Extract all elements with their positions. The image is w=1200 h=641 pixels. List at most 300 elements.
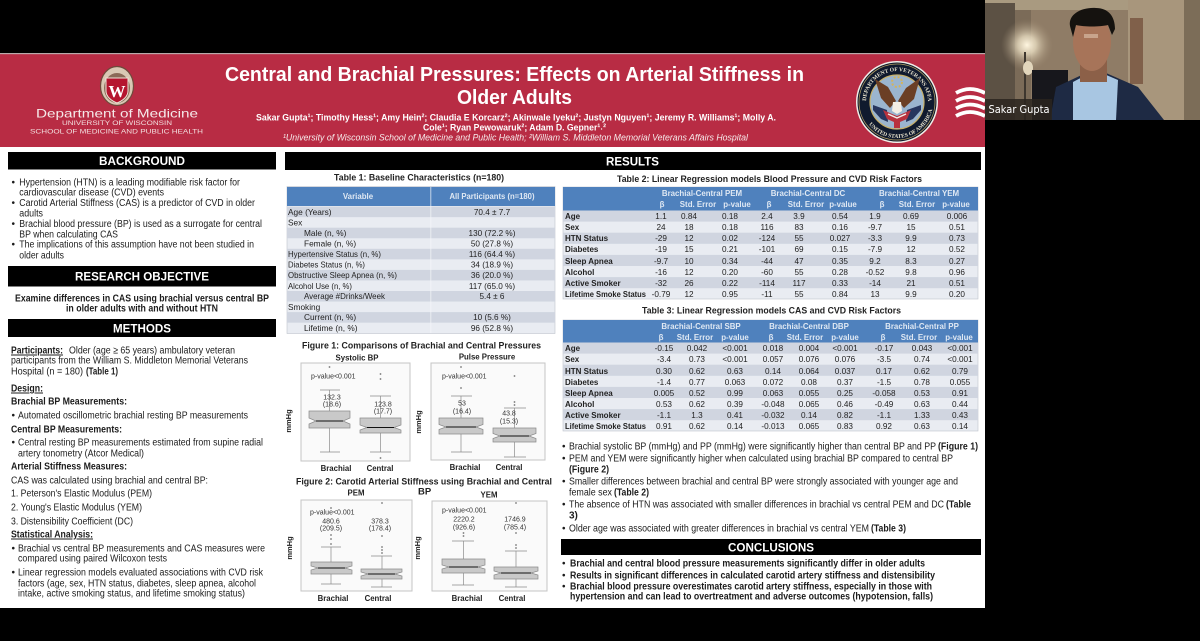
table 3: regression CAS and CVD risk factors: 0.005	[654, 389, 675, 398]
table 2: regression blood pressure and CVD risk factors: 13	[870, 290, 880, 299]
table 3: regression CAS and CVD risk factors: 0.52	[689, 389, 705, 398]
table 3: regression CAS and CVD risk factors: 0.072	[763, 378, 784, 387]
text: arterial stiffness measures: 2. Young's Elastic Modulus (YEM)	[11, 502, 142, 514]
heading: methods: METHODS	[113, 322, 171, 336]
chart: PEM box plot: Central	[365, 594, 391, 603]
table 2: regression blood pressure and CVD risk factors: 15	[684, 245, 694, 254]
objective statement	[15, 294, 269, 314]
bullet list: results findings: (Table	[946, 500, 971, 510]
table 2: regression blood pressure and CVD risk factors: 0.22	[722, 279, 738, 288]
table 3: regression CAS and CVD risk factors: 0.91	[656, 422, 672, 431]
table 3: regression CAS and CVD risk factors: β	[881, 333, 886, 342]
table 2: regression blood pressure and CVD risk factors: 9.8	[905, 268, 917, 277]
table 2: regression blood pressure and CVD risk factors: 0.34	[722, 257, 738, 266]
table 1: baseline characteristics: Hypertensive Status (n, %)	[288, 249, 381, 259]
authors and affiliations	[256, 112, 776, 144]
table 1: baseline characteristics: Current (n, %)	[304, 312, 356, 322]
text: design	[11, 384, 263, 460]
bullet list: results findings: female sex	[569, 488, 612, 498]
table 2: regression blood pressure and CVD risk factors: 0.006	[947, 212, 968, 221]
panel: research objective	[8, 266, 276, 314]
table 3: regression CAS and CVD risk factors: 0.17	[876, 367, 892, 376]
table 2: regression blood pressure and CVD risk factors: p-value	[942, 200, 970, 209]
heading: methods	[8, 319, 276, 337]
title	[225, 64, 804, 109]
bullet list: conclusions	[562, 558, 935, 602]
table 3: regression CAS and CVD risk factors: -0.49	[875, 400, 894, 409]
figure 2: carotid arterial stiffness: BP	[418, 486, 432, 498]
chart: PEM box plot: (209.5)	[320, 526, 342, 532]
table 2: regression blood pressure and CVD risk factors: 0.21	[722, 245, 738, 254]
table 2: regression blood pressure and CVD risk factors: 0.54	[832, 212, 848, 221]
bullet list: results findings: (Table 3)	[871, 524, 906, 534]
table 3: regression CAS and CVD risk factors: <0.001	[832, 344, 858, 353]
bullet list: results findings: •	[562, 500, 566, 510]
table 1: baseline characteristics: Smoking	[288, 302, 321, 312]
bullet list: background: •	[12, 198, 16, 209]
table 1: baseline characteristics: Average #Drinks/Week	[304, 291, 386, 301]
table 3: regression CAS and CVD risk factors: 0.30	[656, 367, 672, 376]
table 2: regression blood pressure and CVD risk factors: 1.1	[655, 212, 667, 221]
table 2: regression blood pressure and CVD risk factors: 12	[906, 245, 916, 254]
table 2: regression blood pressure and CVD risk factors: Lifetime Smoke Status	[565, 290, 647, 299]
table 1: baseline characteristics: 130 (72.2 %)	[469, 229, 516, 238]
table 2: regression blood pressure and CVD risk factors: -114	[759, 279, 775, 288]
table 3: regression CAS and CVD risk factors: -1.4	[657, 378, 672, 387]
table 2: regression blood pressure and CVD risk factors: Diabetes	[565, 245, 599, 254]
chart: YEM box plot: (785.4)	[504, 524, 526, 532]
bullet list: background: •	[12, 219, 16, 230]
authors and affiliations: Sakar Gupta¹; Timothy Hess¹; Amy Hein²; Claudia E Korcarz²; Akinwale Iyeku²; Justyn Nguyen¹; Jeremy R. Williams¹; Molly A.	[256, 112, 776, 124]
table 1: baseline characteristics: All Participants (n=180)	[450, 192, 535, 201]
table 3: regression CAS and CVD risk factors: <0.001	[947, 344, 973, 353]
table 2: regression blood pressure and CVD risk factors: 0.96	[949, 268, 965, 277]
text: arterial stiffness measures: 3. Distensibility Coefficient (DC)	[11, 516, 133, 528]
text: statistical analysis: Linear regression models evaluated associations with CVD risk	[18, 568, 264, 578]
table 3: regression CAS and CVD risk factors: 0.37	[837, 378, 853, 387]
table 3: regression CAS and CVD risk factors: 0.25	[837, 389, 853, 398]
table 2: regression blood pressure and CVD risk factors: 83	[794, 223, 804, 232]
table 3: regression CAS and CVD risk factors: 0.63	[914, 400, 930, 409]
table 2: regression blood pressure and CVD risk factors: 0.20	[722, 268, 738, 277]
table 2: regression blood pressure and CVD risk factors: 0.95	[722, 290, 738, 299]
header banner	[0, 53, 985, 147]
table 2: regression blood pressure and CVD risk factors: -7.9	[868, 245, 883, 254]
table 3: regression CAS and CVD risk factors: 0.39	[727, 400, 743, 409]
table 3: regression CAS and CVD risk factors: -0.17	[875, 344, 894, 353]
table 2: regression blood pressure and CVD risk factors: 0.18	[722, 223, 738, 232]
table 3: regression CAS and CVD risk factors: -0.032	[761, 411, 785, 420]
name tag	[985, 99, 1052, 120]
text: design: Automated oscillometric brachial resting BP measurements	[18, 410, 248, 422]
chart: PEM box plot: p-value<0.001	[310, 510, 355, 516]
table 3: regression CAS and CVD risk factors: 0.063	[725, 378, 746, 387]
panel: methods	[8, 319, 276, 600]
table 3: regression CAS and CVD risk factors: -3.4	[657, 355, 672, 364]
table 2: regression blood pressure and CVD risk factors: 117	[792, 279, 806, 288]
table 3: regression CAS and CVD risk factors: Sleep Apnea	[565, 389, 613, 398]
table 3: regression CAS and CVD risk factors: 0.74	[914, 355, 930, 364]
text: arterial stiffness measures	[11, 462, 208, 528]
table 3: regression CAS and CVD risk factors: -1.1	[657, 411, 672, 420]
poster background	[0, 146, 985, 608]
icon: UW crest: W	[108, 82, 126, 101]
table 3: regression CAS and CVD risk factors: 0.063	[763, 389, 784, 398]
table 2: regression blood pressure and CVD risk factors: 12	[684, 268, 694, 277]
table 2: regression blood pressure and CVD risk factors: Std. Error	[899, 200, 935, 209]
text: statistical analysis: compared using paired Wilcoxon tests	[18, 554, 167, 564]
table 3: regression CAS and CVD risk factors: 0.53	[914, 389, 930, 398]
table 2: regression blood pressure and CVD risk factors: 15	[906, 223, 916, 232]
table 1: baseline characteristics: Table 1: Baseline Characteristics (n=180)	[334, 172, 504, 184]
table 2: regression blood pressure and CVD risk factors: 0.027	[830, 234, 851, 243]
webcam video: presenter	[985, 0, 1200, 120]
table 3: regression CAS and CVD risk factors: 0.057	[763, 355, 784, 364]
text: participants: Older (age ≥ 65 years) ambulatory veteran	[69, 346, 235, 356]
table 3: regression CAS and CVD risk factors: 0.77	[689, 378, 705, 387]
table 3: regression CAS and CVD risk factors: 0.14	[727, 422, 743, 431]
table 3: regression CAS and CVD risk factors: 0.064	[799, 367, 820, 376]
table 3: regression CAS and CVD risk factors: <0.001	[722, 344, 748, 353]
bullet list: results findings: (Figure 2)	[569, 464, 609, 476]
authors and affiliations: ¹University of Wisconsin School of Medicine and Public Health; ²William S. Middleton Memorial Veterans Affairs Hospital	[283, 132, 749, 144]
table 2: regression blood pressure and CVD risk factors: 0.84	[832, 290, 848, 299]
table 3: regression CAS and CVD risk factors: Brachial-Central DBP	[769, 322, 849, 331]
table 2: regression blood pressure and CVD risk factors: 9.9	[905, 290, 917, 299]
table 3: regression CAS and CVD risk factors: 0.065	[799, 422, 820, 431]
table 1: baseline characteristics: 36 (20.0 %)	[471, 271, 513, 280]
logo: UW Department of Medicine: Department of Medicine	[36, 106, 198, 120]
table 3: regression CAS and CVD risk factors: -1.5	[877, 378, 892, 387]
table 3: regression CAS and CVD risk factors: -0.15	[655, 344, 674, 353]
chart: YEM box plot: Central	[499, 594, 525, 603]
table 2: regression blood pressure and CVD risk factors: 0.52	[949, 245, 965, 254]
table 3: regression CAS and CVD risk factors: 0.79	[952, 367, 968, 376]
icon: presenter figure	[1050, 8, 1164, 120]
bullet list: results findings: Brachial systolic BP (mmHg) and PP (mmHg) were significantly higher than central BP and PP	[569, 442, 936, 452]
chart: pulse pressure box plot: (16.4)	[453, 408, 471, 416]
table 3: regression CAS and CVD risk factors: 1.3	[691, 411, 703, 420]
bullet list: background: Brachial blood pressure (BP) is used as a surrogate for central	[19, 219, 262, 230]
chart: systolic BP box plot: Central	[367, 464, 393, 473]
bullet list: conclusions: hypertension and can lead to overtreatment and adverse outcomes (hypotension, falls)	[570, 592, 933, 602]
text: participants: Participants:	[11, 346, 63, 356]
table 3: regression CAS and CVD risk factors: <0.001	[722, 355, 748, 364]
chart: YEM box plot: YEM	[481, 490, 497, 500]
figure 1: comparisons of brachial and central pressures: Figure 1: Comparisons of Brachial and Central Pressures	[302, 340, 541, 352]
table 2: regression blood pressure and CVD risk factors: 55	[794, 268, 804, 277]
table 3: regression CAS and CVD risk factors: 0.44	[952, 400, 968, 409]
text: arterial stiffness measures: CAS was calculated using brachial and central BP:	[11, 476, 208, 486]
table 2: regression blood pressure and CVD risk factors: 10	[684, 257, 694, 266]
table 2: regression blood pressure and CVD risk factors: 9.9	[905, 234, 917, 243]
table 2: regression blood pressure and CVD risk factors: Brachial-Central DC	[771, 189, 846, 198]
chart: systolic BP box plot: 132.3	[323, 394, 341, 402]
table 2: regression blood pressure and CVD risk factors: 0.69	[903, 212, 919, 221]
text: participants	[11, 346, 248, 378]
chart: pulse pressure box plot: (15.3)	[500, 418, 518, 426]
table 2: regression blood pressure and CVD risk factors: 0.18	[722, 212, 738, 221]
table 3: regression CAS and CVD risk factors: 0.73	[689, 355, 705, 364]
table 3: regression CAS and CVD risk factors: 0.065	[799, 400, 820, 409]
heading: conclusions	[561, 539, 981, 555]
bullet list: background: BP when calculating CAS	[19, 230, 118, 240]
table 1: baseline characteristics: Obstructive Sleep Apnea (n, %)	[288, 270, 397, 280]
bullet list: background: cardiovascular disease (CVD) events	[19, 188, 164, 198]
chart: systolic BP box plot: (18.6)	[323, 402, 341, 408]
text: statistical analysis: Statistical Analysis:	[11, 530, 93, 540]
table 1: baseline characteristics: Diabetes Status (n, %)	[288, 260, 365, 270]
table 2: regression blood pressure and CVD risk factors: HTN Status	[565, 234, 609, 243]
table 2: regression blood pressure and CVD risk factors: Std. Error	[680, 200, 716, 209]
table 3: regression CAS and CVD risk factors: 0.63	[914, 422, 930, 431]
chart: pulse pressure box plot	[414, 352, 545, 472]
table 3: regression CAS and CVD risk factors: Std. Error	[787, 333, 823, 342]
table 2: regression blood pressure and CVD risk factors: 12	[684, 290, 694, 299]
table 2: regression blood pressure and CVD risk factors: 21	[906, 279, 916, 288]
chart: systolic BP box plot: Brachial	[321, 464, 351, 473]
table 2: regression blood pressure and CVD risk factors: -124	[759, 234, 776, 243]
text: participants: Hospital (n = 180)	[11, 366, 83, 378]
table 3: regression CAS and CVD risk factors: 0.14	[765, 367, 781, 376]
chart: YEM box plot: p-value<0.001	[442, 508, 487, 514]
table 3: regression CAS and CVD risk factors: <0.001	[947, 355, 973, 364]
title: Older Adults	[457, 87, 572, 109]
bullet list: results findings: (Figure 1)	[938, 442, 978, 452]
table 3: regression CAS and CVD risk factors: Age	[565, 344, 581, 353]
bullet list: background: adults	[19, 208, 43, 220]
table 3: regression CAS and CVD risk factors: Brachial-Central SBP	[661, 322, 741, 331]
table 1: baseline characteristics: Sex	[288, 218, 303, 228]
table 3: regression CAS and CVD risk factors: Sex	[565, 355, 580, 364]
text: participants: (Table 1)	[86, 366, 118, 378]
bullet list: conclusions: Results in significant differences in calculated carotid artery stiffness and distensibility	[570, 570, 935, 582]
table 2: regression blood pressure and CVD risk factors: 12	[684, 234, 694, 243]
table 2: regression blood pressure and CVD risk factors: 24	[656, 223, 666, 232]
table 2: regression blood pressure and CVD risk factors: p-value	[723, 200, 751, 209]
table 2: regression blood pressure and CVD risk factors: -9.7	[654, 257, 669, 266]
table 2: regression blood pressure and CVD risk factors: 18	[684, 223, 694, 232]
table 2: regression blood pressure and CVD risk factors: 0.51	[949, 223, 965, 232]
heading: results: RESULTS	[606, 154, 659, 168]
table 2: regression blood pressure and CVD risk factors: -29	[655, 234, 667, 243]
chart: systolic BP box plot: p-value<0.001	[311, 374, 356, 380]
text: arterial stiffness measures: Arterial Stiffness Measures:	[11, 462, 127, 472]
icon: waves logo	[956, 89, 985, 116]
table 2: regression blood pressure and CVD risk factors: -101	[759, 245, 776, 254]
bullet list: background: Hypertension (HTN) is a leading modifiable risk factor for	[19, 178, 241, 188]
chart: systolic BP box plot: Systolic BP	[336, 354, 378, 362]
icon: Veterans Affairs seal	[856, 61, 938, 143]
text: design: Design:	[11, 384, 43, 394]
table 2: regression blood pressure and CVD risk factors: Age	[565, 212, 581, 221]
authors and affiliations: Cole¹; Ryan Pewowaruk²; Adam D. Gepner¹˒²	[423, 122, 606, 134]
chart: systolic BP box plot: 123.8	[374, 402, 392, 408]
table 2: regression blood pressure and CVD risk factors: -3.3	[868, 234, 883, 243]
table 2: regression blood pressure and CVD risk factors: 69	[794, 245, 804, 254]
heading: results	[285, 152, 981, 170]
chart: pulse pressure box plot: 53	[458, 400, 466, 408]
chart: PEM box plot	[285, 488, 412, 603]
chart: systolic BP box plot: mmHg	[284, 409, 293, 433]
bullet list: conclusions: Brachial and central blood pressure measurements significantly differ in older adults	[570, 558, 925, 570]
table 3: regression CAS and CVD risk factors: Std. Error	[677, 333, 713, 342]
text: statistical analysis: Brachial vs central BP measurements and CAS measures were	[18, 544, 265, 554]
table 2: regression blood pressure and CVD risk factors: 0.15	[832, 245, 848, 254]
table 3: regression CAS and CVD risk factors: 0.53	[656, 400, 672, 409]
table 1: baseline characteristics: Age (Years)	[288, 207, 332, 217]
table 3: regression CAS and CVD risk factors: p-value	[945, 333, 973, 342]
table 3: regression CAS and CVD risk factors: 0.63	[727, 367, 743, 376]
bullet list: results findings: •	[562, 476, 566, 488]
table 1: baseline characteristics: 34 (18.9 %)	[471, 260, 513, 270]
bullet list: conclusions: •	[562, 570, 566, 582]
table 3: regression CAS and CVD risk factors: 0.91	[952, 389, 968, 398]
table 1: baseline characteristics: 117 (65.0 %)	[469, 282, 515, 291]
table 3: regression CAS and CVD risk factors: p-value	[831, 333, 859, 342]
table 2: regression blood pressure and CVD risk factors: 55	[794, 290, 804, 299]
table 3: regression CAS and CVD risk factors: 0.14	[952, 422, 968, 431]
panel: conclusions	[561, 539, 981, 602]
table 2: regression blood pressure and CVD risk factors: 0.28	[832, 268, 848, 277]
table 2: regression blood pressure and CVD risk factors: 0.27	[949, 257, 965, 266]
table 2: regression blood pressure and CVD risk factors: -14	[869, 279, 881, 288]
table 2: regression blood pressure and CVD risk factors: Sex	[565, 223, 580, 232]
table 2: regression blood pressure and CVD risk factors: 116	[760, 223, 774, 232]
text: design: artery tonometry (Atcor Medical)	[18, 448, 144, 460]
icon: UW crest	[100, 66, 134, 106]
chart: pulse pressure box plot: 43.8	[502, 410, 516, 418]
chart: PEM box plot: 378.3	[371, 518, 389, 526]
chart: PEM box plot: PEM	[348, 488, 364, 498]
bullet list: conclusions: Brachial blood pressure overestimates carotid artery stiffness, especially in those with	[570, 582, 932, 592]
bullet list: results findings: Smaller differences between brachial and central BP were strongly associated with younger age and	[569, 476, 958, 488]
table 1: baseline characteristics: Lifetime (n, %)	[304, 323, 358, 333]
table 3: regression CAS and CVD risk factors: 0.043	[912, 344, 933, 353]
table 2: regression blood pressure and CVD risk factors: -11	[761, 290, 773, 299]
table 2: regression blood pressure and CVD risk factors: -0.52	[866, 268, 885, 277]
table 2: regression blood pressure and CVD risk factors: Brachial-Central PEM	[662, 189, 743, 198]
table 2: regression blood pressure and CVD risk factors: -32	[655, 279, 667, 288]
chart: YEM box plot: Brachial	[452, 594, 482, 603]
table 3: regression CAS and CVD risk factors: 0.018	[763, 344, 784, 353]
chart: YEM box plot: 2220.2	[453, 516, 475, 524]
table 3: regression CAS and CVD risk factors: Table 3: Linear Regression models CAS and CVD Risk Factors	[642, 306, 901, 316]
table 2: regression blood pressure and CVD risk factors: Sleep Apnea	[565, 257, 613, 266]
table 2: regression blood pressure and CVD risk factors: -60	[761, 268, 773, 277]
chart: pulse pressure box plot: mmHg	[414, 410, 423, 434]
bullet list: background: •	[12, 240, 16, 250]
table 2: regression blood pressure and CVD risk factors: 47	[794, 257, 804, 266]
table 2: regression blood pressure and CVD risk factors: β	[880, 200, 885, 209]
table 3: regression CAS and CVD risk factors: -0.013	[761, 422, 785, 431]
table 2: regression blood pressure and CVD risk factors: Std. Error	[788, 200, 824, 209]
chart: pulse pressure box plot: p-value<0.001	[442, 374, 487, 380]
table 3: regression CAS and CVD risk factors: 0.82	[837, 411, 853, 420]
chart: YEM box plot	[413, 490, 547, 603]
chart: pulse pressure box plot: Brachial	[450, 463, 480, 472]
table 3: regression CAS and CVD risk factors: -3.5	[877, 355, 892, 364]
table 2: regression blood pressure and CVD risk factors: 0.35	[832, 257, 848, 266]
table 2: regression blood pressure and CVD risk factors: 9.2	[869, 257, 881, 266]
name tag: Sakar Gupta	[988, 104, 1050, 116]
table 3: regression CAS and CVD risk factors: Std. Error	[901, 333, 937, 342]
table 2: regression blood pressure and CVD risk factors: p-value	[829, 200, 857, 209]
table 2: regression blood pressure and CVD risk factors: 0.20	[949, 290, 965, 299]
table 2: regression blood pressure and CVD risk factors: β	[767, 200, 772, 209]
table 3: regression CAS and CVD risk factors: -0.058	[872, 389, 896, 398]
text: statistical analysis: •	[12, 568, 16, 578]
table 2: regression blood pressure and CVD risk factors: Table 2: Linear Regression models Blood Pressure and CVD Risk Factors	[617, 174, 922, 185]
table 1: baseline characteristics: 50 (27.8 %)	[471, 240, 513, 248]
table 2: regression blood pressure and CVD risk factors: 0.16	[832, 223, 848, 232]
table 3: regression CAS and CVD risk factors: Lifetime Smoke Status	[565, 422, 647, 431]
figure 2: carotid arterial stiffness	[285, 476, 552, 603]
table 3: regression CAS and CVD risk factors: 0.055	[950, 378, 971, 387]
table 3: regression CAS and CVD risk factors: β	[659, 333, 664, 342]
table 3: regression CAS and CVD risk factors: p-value	[721, 333, 749, 342]
table 2: regression blood pressure and CVD risk factors: -9.7	[868, 223, 883, 232]
table 2: regression blood pressure and CVD risk factors: 1.9	[869, 212, 881, 221]
text: arterial stiffness measures: 1. Peterson's Elastic Modulus (PEM)	[11, 488, 152, 500]
table 1: baseline characteristics: Female (n, %)	[304, 238, 356, 248]
table 3: regression CAS and CVD risk factors: 0.08	[801, 378, 817, 387]
table 2: regression blood pressure and CVD risk factors: 8.3	[905, 257, 917, 266]
table 2: regression blood pressure and CVD risk factors: 3.9	[793, 212, 805, 221]
table 3: regression CAS and CVD risk factors: -1.1	[877, 411, 892, 420]
table 1: baseline characteristics: Male (n, %)	[304, 228, 347, 238]
chart: PEM box plot: 480.6	[322, 518, 340, 526]
chart: pulse pressure box plot: Central	[496, 463, 522, 472]
chart: YEM box plot: (926.6)	[453, 524, 475, 532]
bullet list: results findings: The absence of HTN was associated with smaller differences in brachial vs central PEM and DC	[569, 500, 944, 510]
text: design: •	[12, 438, 16, 448]
text: statistical analysis	[11, 530, 265, 600]
table 1: baseline characteristics: 10 (5.6 %)	[473, 313, 511, 322]
bullet list: results findings: •	[562, 524, 566, 534]
table 2: regression blood pressure and CVD risk factors: -44	[761, 257, 773, 266]
text: design: •	[12, 410, 16, 422]
table 3: regression CAS and CVD risk factors: 1.33	[914, 411, 930, 420]
table 2: regression blood pressure and CVD risk factors: -0.79	[652, 290, 671, 299]
text: design: Central BP Measurements:	[11, 424, 122, 436]
table 1: baseline characteristics: Variable	[343, 192, 374, 201]
bullet list: background: •	[12, 178, 16, 188]
table 3: regression CAS and CVD risk factors: 0.99	[727, 389, 743, 398]
bullet list: background: Carotid Arterial Stiffness (CAS) is a predictor of CVD in older	[19, 198, 256, 209]
table 3: regression CAS and CVD risk factors: 0.037	[835, 367, 856, 376]
bullet list: results findings: PEM and YEM were significantly higher when calculated using brachial BP compared to central BP	[569, 454, 953, 464]
table 2: regression blood pressure and CVD risk factors: 0.02	[722, 234, 738, 243]
chart: YEM box plot: mmHg	[413, 536, 422, 560]
text: design: Brachial BP Measurements:	[11, 396, 127, 408]
table 2: regression blood pressure and CVD risk factors: 26	[684, 279, 694, 288]
objective statement: in older adults with and without HTN	[66, 304, 218, 314]
heading: research objective	[8, 266, 276, 286]
table 2: regression blood pressure and CVD risk factors: 2.4	[761, 212, 773, 221]
table 3: regression CAS and CVD risk factors: 0.78	[914, 378, 930, 387]
heading: research objective: RESEARCH OBJECTIVE	[75, 270, 209, 284]
table 2: regression blood pressure and CVD risk factors: -19	[655, 245, 667, 254]
table 1: baseline characteristics: 96 (52.8 %)	[471, 324, 513, 333]
table 3: regression CAS and CVD risk factors: HTN Status	[565, 367, 609, 376]
heading: conclusions: CONCLUSIONS	[728, 540, 814, 554]
table 1: baseline characteristics	[287, 172, 555, 334]
bullet list: results findings: Older age was associated with greater differences in brachial vs central YEM	[569, 524, 869, 534]
figure 1: comparisons of brachial and central pressures	[284, 340, 545, 473]
table 3: regression CAS and CVD risk factors: -0.048	[761, 400, 785, 409]
text: design: Central resting BP measurements estimated from supine radial	[18, 438, 263, 448]
